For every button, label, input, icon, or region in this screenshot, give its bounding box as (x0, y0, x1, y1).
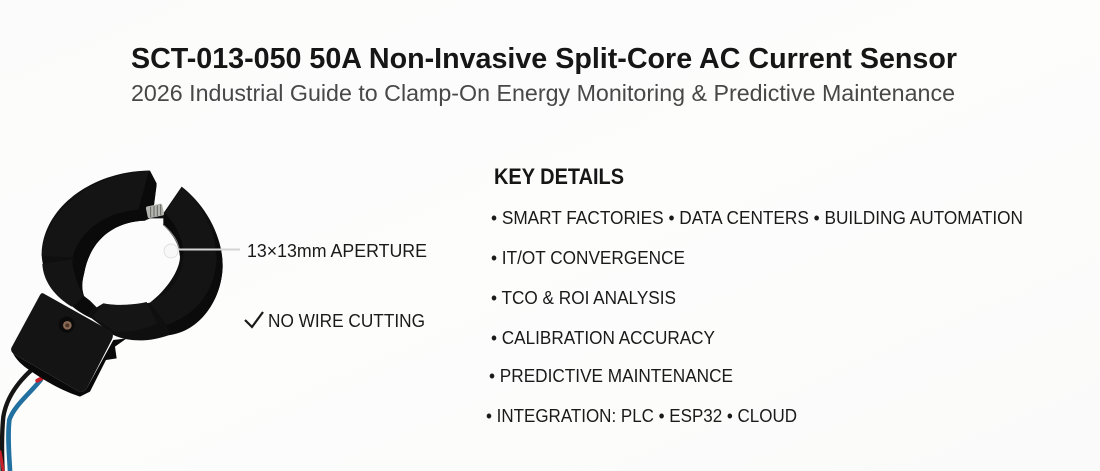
ring segment: lower left (42, 259, 84, 307)
subtitle: 2026 Industrial Guide to Clamp-On Energy Monitoring & Predictive Maintenance (131, 80, 955, 106)
callout marker dot (164, 244, 178, 258)
ring aperture (82, 218, 180, 307)
feature label: NO WIRE CUTTING (268, 311, 425, 331)
terminal box (11, 293, 113, 392)
wires (0, 368, 46, 471)
list item: maintenance: • PREDICTIVE MAINTENANCE (489, 366, 733, 386)
ring shell and side wall (42, 171, 223, 340)
icon: check mark (245, 312, 263, 327)
heading: KEY DETAILS (494, 164, 624, 189)
ring segment: upper left (42, 171, 149, 257)
product photo: split-core current sensor (0, 171, 223, 471)
title: SCT-013-050 50A Non-Invasive Split-Core AC Current Sensor (131, 43, 957, 75)
ring segment: bottom (93, 302, 157, 332)
list item: TCO: • TCO & ROI ANALYSIS (491, 288, 676, 308)
list item: integration: • INTEGRATION: PLC • ESP32 • CLOUD (486, 406, 797, 426)
list item: applications: • SMART FACTORIES • DATA CENTERS • BUILDING AUTOMATION (491, 208, 1023, 228)
callout label: 13×13mm APERTURE (247, 241, 427, 261)
callout: aperture (164, 241, 427, 261)
feature: no wire cutting (245, 311, 425, 331)
list item: calibration: • CALIBRATION ACCURACY (491, 328, 715, 348)
terminal screw (59, 317, 75, 333)
panel: key details (486, 164, 1023, 426)
ring segment: right (150, 187, 217, 325)
callout leader line (175, 248, 240, 250)
hinge screw (146, 203, 164, 219)
list item: convergence: • IT/OT CONVERGENCE (491, 248, 685, 268)
